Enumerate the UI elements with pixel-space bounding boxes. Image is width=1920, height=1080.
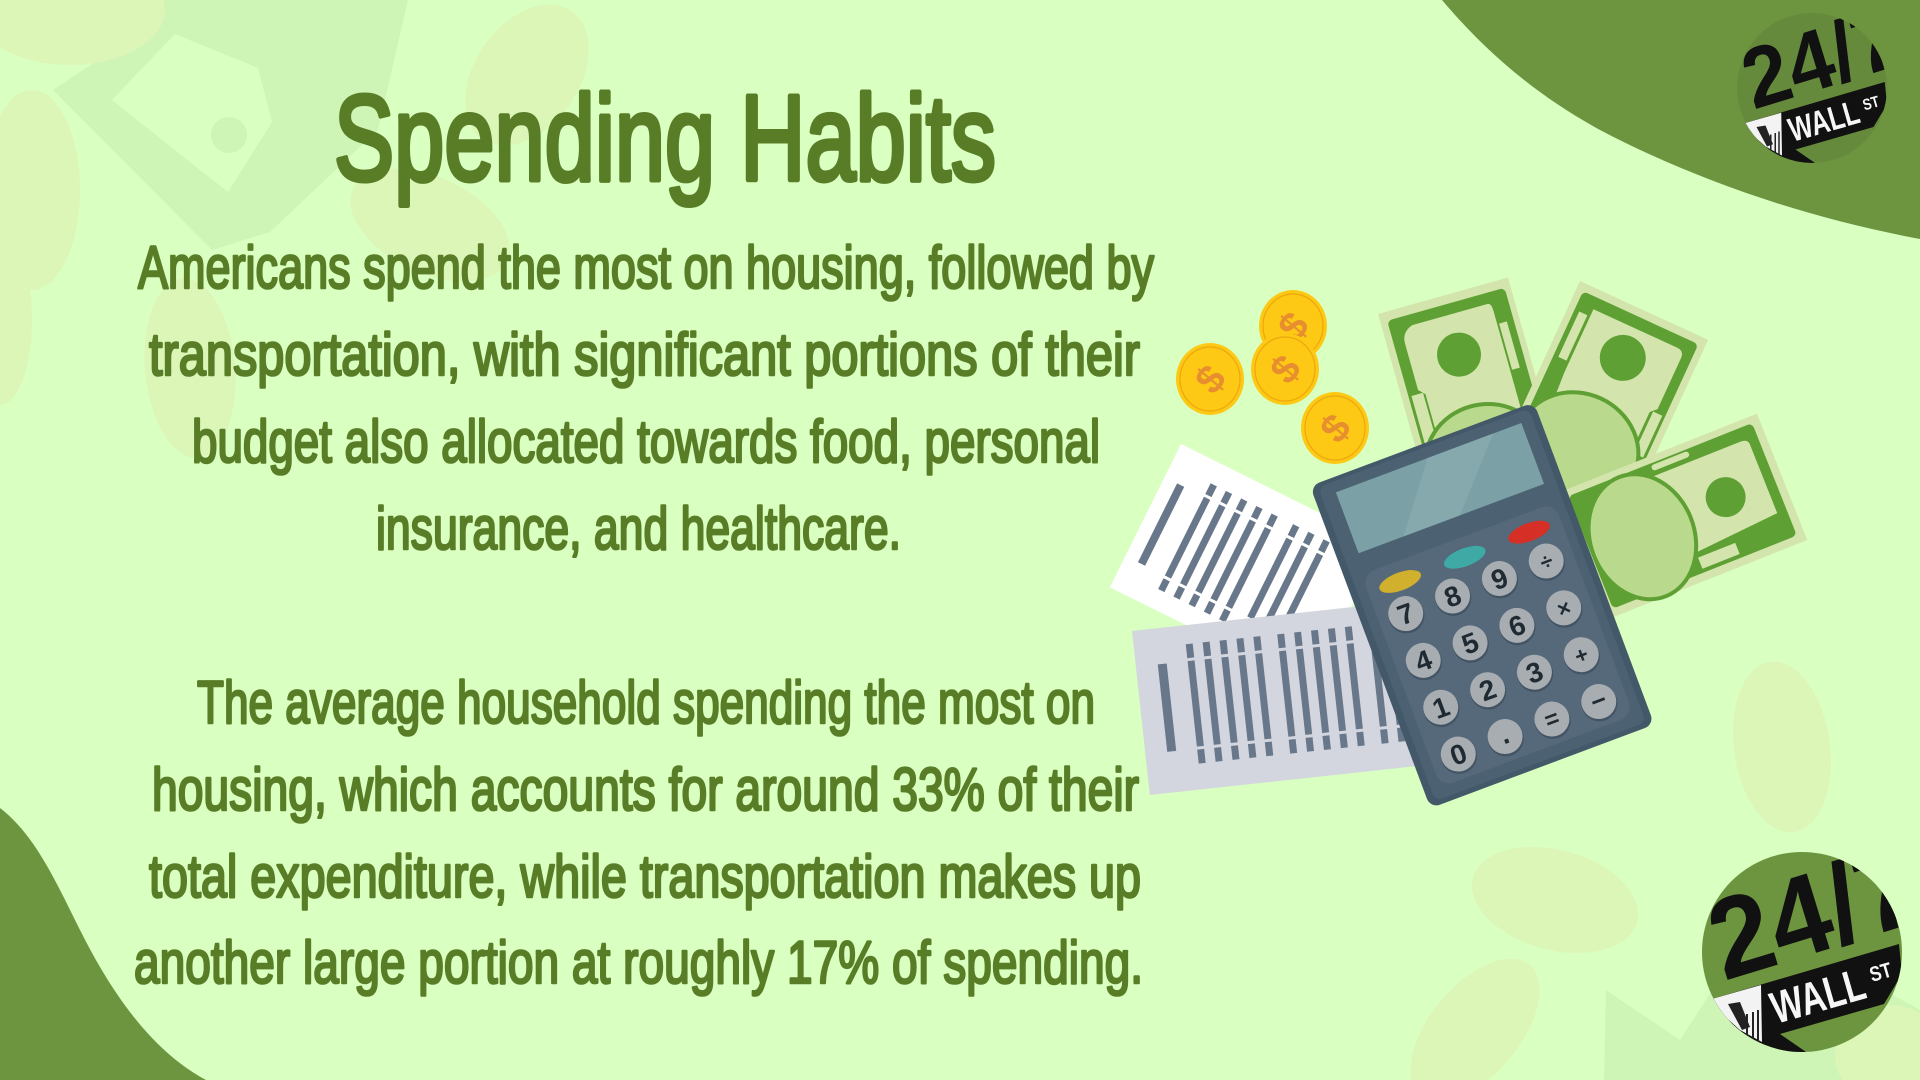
icon: calculator: − xyxy=(1586,684,1611,717)
icon: calculator: 7 xyxy=(1393,597,1419,631)
text block: second paragraph: housing, which accounts for around 33% of their xyxy=(152,756,1139,823)
corner shape: top right xyxy=(1442,0,1920,239)
icon: coins: $ xyxy=(1270,304,1318,349)
logo: 24/7 Wall St top right: ST xyxy=(1861,93,1882,114)
text block: first paragraph: transportation, with significant portions of their xyxy=(149,321,1140,388)
icon: calculator: . xyxy=(1495,718,1513,750)
text block: second paragraph: The average household spending the most on xyxy=(197,669,1095,736)
text block: second paragraph xyxy=(134,669,1143,996)
text block: first paragraph: Americans spend the most on housing, followed by xyxy=(138,234,1154,301)
text block: second paragraph: another large portion at roughly 17% of spending. xyxy=(134,929,1143,996)
title: Spending Habits xyxy=(334,70,996,206)
icon: calculator: 9 xyxy=(1487,562,1512,596)
icon: coins: $ xyxy=(1262,347,1310,392)
corner shape: bottom left xyxy=(0,808,206,1080)
logo: 24/7 Wall St bottom right xyxy=(1702,852,1902,1052)
icon: calculator: × xyxy=(1554,594,1574,622)
icon: banknote right xyxy=(1484,281,1708,549)
icon: calculator: 0 xyxy=(1446,737,1471,772)
text block: second paragraph: total expenditure, while transportation makes up xyxy=(149,843,1141,910)
icon: calculator: 2 xyxy=(1475,673,1500,707)
icon: coins: $ xyxy=(1312,406,1360,451)
logo: 24/7 Wall St bottom right: 24/7 xyxy=(1694,820,1920,1004)
logo: 24/7 Wall St bottom right: WALL xyxy=(1765,958,1871,1034)
logo: 24/7 Wall St top right xyxy=(1737,13,1887,163)
icon: banknote bottom xyxy=(1560,414,1807,618)
icon: coins: $ xyxy=(1187,357,1235,402)
icon: coins xyxy=(1176,290,1369,464)
text block: first paragraph: budget also allocated towards food, personal xyxy=(192,408,1100,475)
logo: 24/7 Wall St bottom right: ST xyxy=(1867,959,1895,987)
logo: 24/7 Wall St top right: WALL xyxy=(1784,93,1864,150)
icon: calculator xyxy=(1310,402,1654,808)
icon: calculator: 1 xyxy=(1428,690,1454,725)
icon: calculator: 6 xyxy=(1504,609,1530,643)
icon: calculator: 3 xyxy=(1522,655,1547,690)
text block: first paragraph xyxy=(138,234,1154,562)
icon: calculator: + xyxy=(1571,641,1592,669)
icon: banknote left xyxy=(1378,277,1570,535)
icon: grey receipt xyxy=(1132,600,1438,795)
icon: white receipt xyxy=(1110,444,1383,687)
icon: calculator: 5 xyxy=(1458,626,1483,661)
icon: calculator: ÷ xyxy=(1536,548,1556,575)
text block: first paragraph: insurance, and healthcare. xyxy=(376,495,901,562)
icon: calculator: 4 xyxy=(1411,643,1437,678)
icon: calculator: 8 xyxy=(1440,579,1465,614)
icon: calculator: = xyxy=(1541,704,1563,735)
